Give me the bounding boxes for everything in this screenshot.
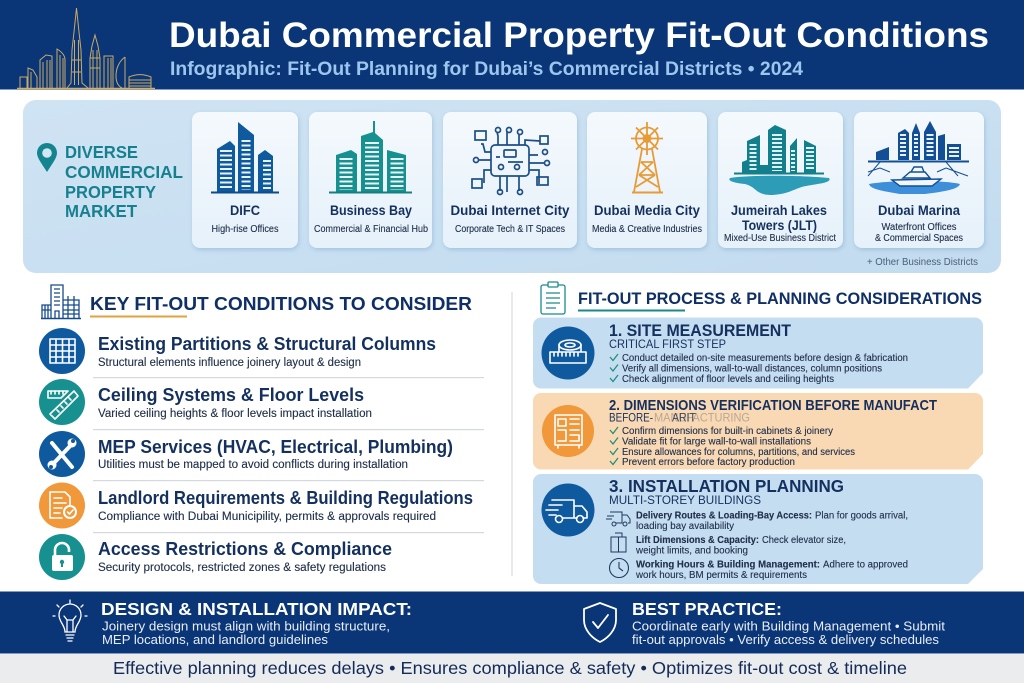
icon: light bulb [53,600,87,641]
icon: blueprint [555,415,582,448]
label: Jumeirah Lakes [731,202,827,218]
item: existing partitions [39,328,436,374]
item: MEP services [39,431,453,477]
label: DIFC [230,202,260,218]
sublabel: Commercial & Financial Hub [314,224,428,235]
label: Dubai Media City [594,202,700,218]
panel: diverse commercial property market [23,100,1001,273]
sublabel: High-rise Offices [212,224,278,235]
sublabel line 2: & Commercial Spaces [875,233,963,244]
step subtitle: MANUFACTURING [654,412,750,424]
icon: Business Bay towers [329,121,412,192]
item title: Existing Partitions & Structural Columns [98,333,436,354]
icon: ruler [48,391,78,419]
item title: Ceiling Systems & Floor Levels [98,384,364,405]
step subtitle: CRITICAL FIRST STEP [609,339,726,351]
item: landlord requirements [39,482,473,528]
icon: buildings [41,285,81,318]
strip text: Effective planning reduces delays • Ensures compliance & safety • Optimizes fit-out cost & timeline [113,658,907,678]
sublabel: Corporate Tech & IT Spaces [455,224,565,235]
label: Business Bay [330,202,412,218]
panel: fit-out process and planning [533,282,983,584]
detail: delivery routes: Delivery Routes & Loading-Bay Access: [636,511,812,522]
sublabel: Mixed-Use Business District [724,233,836,244]
step subtitle [609,412,750,424]
note: other business districts: + Other Business Districts [867,257,978,268]
step title: 2. DIMENSIONS VERIFICATION BEFORE MANUFACT [609,397,937,414]
impact text line 2: MEP locations, and landlord guidelines [102,633,328,647]
icon: broadcast tower [631,122,663,192]
step 3: installation planning [533,474,983,584]
header banner [0,0,1024,90]
step title: 1. SITE MEASUREMENT [609,322,791,340]
bottom strip [0,654,1024,683]
item: ceiling systems [39,379,372,425]
checklist: Prevent errors before factory production [622,457,795,468]
checklist [610,426,855,468]
icon: document with badge [50,492,76,518]
footer banner [0,592,1024,654]
impact text: Joinery design must align with building structure, [102,620,390,634]
label: Dubai Internet City [450,202,570,218]
detail: working hours [610,558,908,581]
item description: Compliance with Dubai Municipility, permits & approvals required [98,511,436,523]
checklist: Check alignment of floor levels and ceiling heights [622,374,834,385]
heading: FIT-OUT PROCESS & PLANNING CONSIDERATIONS [578,289,982,308]
icon: marina skyline and yacht [868,121,969,194]
detail: working hours: Working Hours & Building Management: [636,560,820,570]
heading underline [90,316,187,318]
card: Business Bay [309,112,432,248]
icon: shield check [584,603,616,642]
icon: location pin [37,143,57,172]
card: Dubai Internet City [443,112,577,248]
panel heading: PROPERTY [65,182,156,202]
step 2: dimensions verification [533,393,983,470]
step subtitle: ARIT [672,412,696,424]
detail: working hours: Adhere to approved [823,560,908,570]
card: Jumeirah Lakes Towers [718,112,843,248]
icon: measuring tape [550,340,586,363]
detail: working hours: work hours, BM permits & requirements [635,570,807,581]
panel heading: MARKET [65,201,137,221]
best practice heading: BEST PRACTICE: [632,599,782,619]
item description: Security protocols, restricted zones & safety regulations [98,562,386,574]
detail: lift dimensions: Lift Dimensions & Capacity: [636,535,759,546]
item description: Utilities must be mapped to avoid conflicts during installation [98,459,408,471]
best practice text line 2: fit-out approvals • Verify access & delivery schedules [632,633,939,647]
sublabel: Waterfront Offices [882,222,956,233]
label: Dubai Marina [878,202,960,218]
item description: Structural elements influence joinery layout & design [98,357,361,369]
checklist: Ensure allowances for columns, partitions, and services [622,447,855,458]
checklist: Verify all dimensions, wall-to-wall distances, column positions [622,364,882,374]
card: Dubai Media City [587,112,707,248]
item title: Landlord Requirements & Building Regulations [98,487,473,508]
heading: KEY FIT-OUT CONDITIONS TO CONSIDER [90,293,472,314]
icon: padlock [52,543,73,571]
step subtitle: MULTI-STOREY BUILDINGS [609,495,761,507]
item description: Varied ceiling heights & floor levels impact installation [98,408,372,420]
sublabel: Media & Creative Industries [592,224,702,235]
subtitle: Infographic: Fit-Out Planning for Dubai’s Commercial Districts • 2024 [170,58,803,80]
step title: 3. INSTALLATION PLANNING [609,476,844,496]
icon: circuit chip [472,128,550,194]
panel heading [65,142,183,221]
card: Dubai Marina [854,112,984,248]
item: access restrictions [39,534,392,580]
title: Dubai Commercial Property Fit-Out Conditions [169,16,989,55]
step subtitle: BEFORE- [609,412,653,424]
impact heading: DESIGN & INSTALLATION IMPACT: [101,599,412,619]
step 1: site measurement [533,318,983,388]
icon: crossed tools [48,438,76,470]
detail: delivery routes [606,511,908,532]
icon: JLT towers and lake [729,125,830,195]
detail: lift dimensions [611,533,846,556]
detail: lift dimensions: Check elevator size, [762,535,846,546]
panel heading: COMMERCIAL [65,162,183,182]
item title: MEP Services (HVAC, Electrical, Plumbing) [98,436,453,457]
panel: key fit-out conditions [39,285,484,580]
icon: delivery truck [546,500,587,522]
checklist: Validate fit for large wall-to-wall installations [622,436,811,448]
card: DIFC [192,112,298,248]
best practice text: Coordinate early with Building Management • Submit [632,620,946,634]
checklist: Conduct detailed on-site measurements before design & fabrication [622,353,908,364]
checklist: Confirm dimensions for built-in cabinets & joinery [622,426,833,437]
label line 2: Towers (JLT) [742,217,817,233]
icon: DIFC towers [211,122,279,192]
item title: Access Restrictions & Compliance [98,538,392,559]
detail: delivery routes: loading bay availability [636,521,734,532]
panel heading: DIVERSE [65,142,138,162]
detail: delivery routes: Plan for goods arrival, [815,511,908,522]
detail: lift dimensions: weight limits, and booking [635,546,748,556]
icon: clipboard [541,282,565,314]
icon: grid [50,339,75,363]
checklist [610,353,908,385]
heading underline [578,310,685,312]
icon: gold Dubai skyline [17,8,155,88]
